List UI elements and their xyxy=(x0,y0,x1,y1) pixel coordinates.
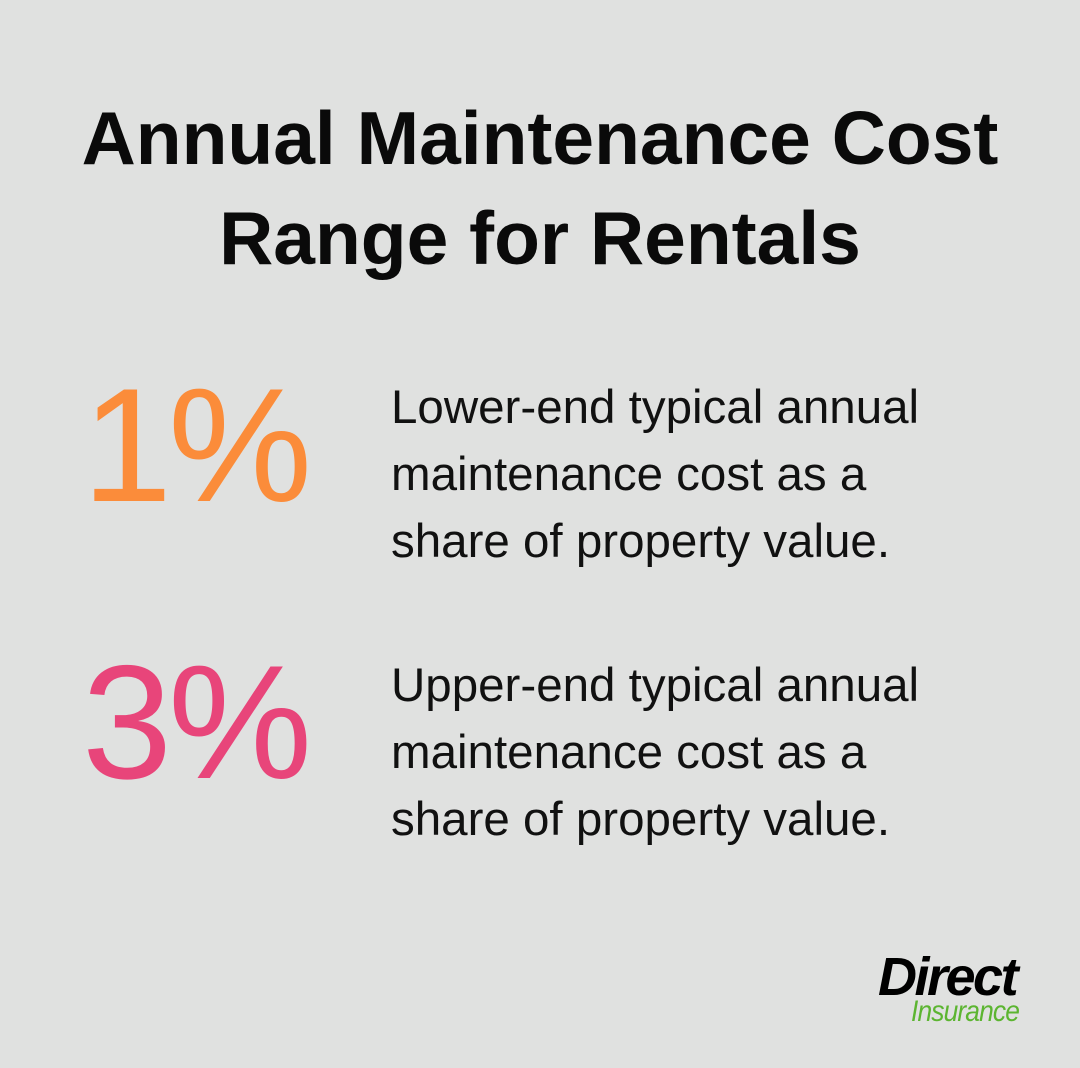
text: lower-end description xyxy=(391,381,919,568)
title: Range for Rentals xyxy=(219,196,861,280)
text: upper-end description xyxy=(391,659,919,846)
stat: 3%: 3% xyxy=(82,632,308,813)
stat: 1%: 1% xyxy=(82,355,308,536)
logo: Direct Insurance: Insurance xyxy=(911,995,1019,1028)
text: lower-end description: Lower-end typical annual xyxy=(391,381,919,434)
text: lower-end description: maintenance cost as a xyxy=(391,448,866,501)
text: lower-end description: share of property value. xyxy=(391,515,890,568)
title xyxy=(82,96,998,280)
text: upper-end description: maintenance cost as a xyxy=(391,726,866,779)
text: upper-end description: Upper-end typical annual xyxy=(391,659,919,712)
logo: Direct Insurance: Direct xyxy=(878,947,1016,1007)
text: upper-end description: share of property value. xyxy=(391,793,890,846)
title: Annual Maintenance Cost xyxy=(82,96,998,180)
